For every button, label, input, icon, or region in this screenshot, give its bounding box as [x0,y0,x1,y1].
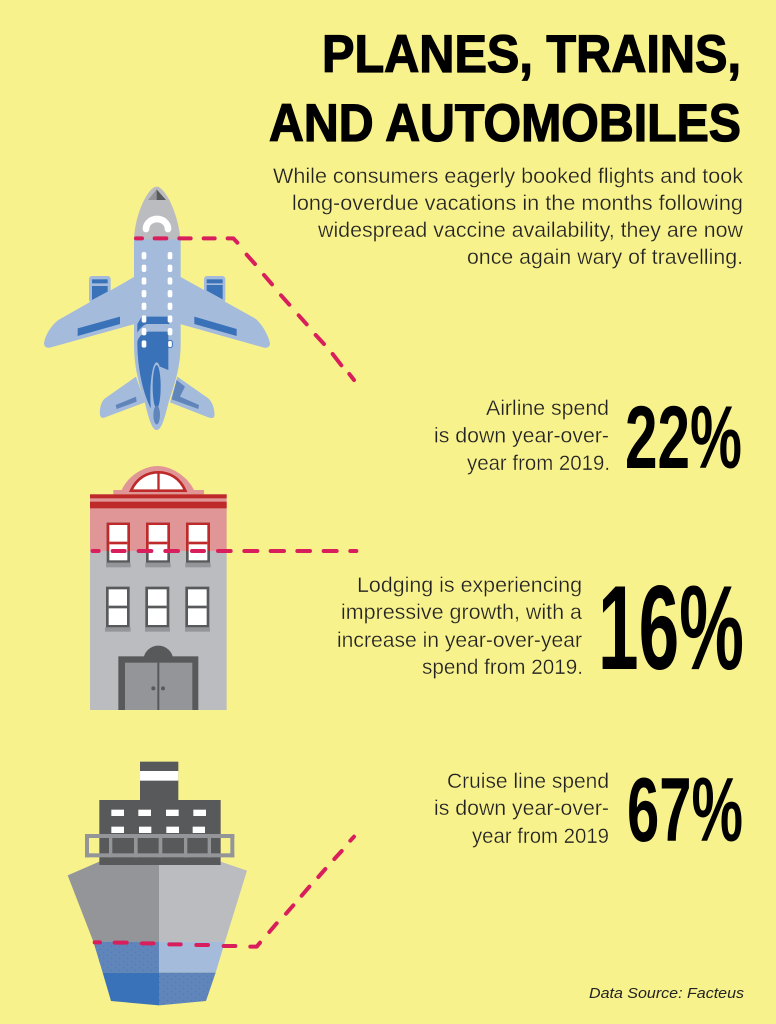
hotel upper windows [106,523,211,567]
hotel cornice [90,494,227,508]
ship hull upper [68,862,247,942]
cruise caption [434,769,609,848]
data source: Data Source: Facteus [589,985,745,1002]
hotel lower storey [90,551,227,710]
lodging caption: Lodging is experiencing [357,573,582,597]
airline caption: Airline spend [486,396,609,420]
lodging caption: increase in year-over-year [337,628,582,652]
stat: cruise line [434,760,743,861]
plane nose [134,187,180,239]
stat: airline [434,387,742,487]
ship superstructure [99,800,221,865]
hotel fanlight window [131,472,185,491]
title [269,25,741,153]
hotel lower windows [105,587,210,632]
title: PLANES, TRAINS, [322,25,741,84]
airline caption [434,396,610,475]
icon: cruise ship [68,762,354,1005]
plane tail flaps [116,380,199,409]
ship hull waterline [93,942,225,1005]
title: AND AUTOMOBILES [269,94,741,153]
ship funnel [140,762,178,800]
plane fuselage [134,238,181,430]
plane engines and flaps [78,279,237,336]
lodging caption: impressive growth, with a [341,600,582,624]
intro text: widespread vaccine availability, they are now [317,218,743,242]
cruise caption: Cruise line spend [447,769,609,793]
airline caption: is down year-over- [434,424,609,448]
dashed leader: airplane [136,238,354,380]
dashed leader: hotel [93,545,356,557]
ship railing [85,834,234,857]
cruise caption: year from 2019 [472,824,609,848]
plane wings [44,276,270,418]
lodging caption [337,573,583,679]
ship windows [111,810,206,833]
hotel dome [113,466,204,494]
intro text: once again wary of travelling. [467,245,743,269]
hotel entrance door [118,646,198,710]
icon: hotel building [90,466,356,710]
plane windows [142,252,172,348]
dashed leader: ship [95,837,354,947]
intro text [273,164,743,269]
plane rear body [137,317,169,428]
intro text: long-overdue vacations in the months following [292,191,743,215]
airline caption: year from 2019. [467,451,610,475]
stat: lodging [337,561,744,695]
lodging caption: spend from 2019. [422,655,583,679]
hotel upper storey [90,494,227,551]
icon: airplane [44,187,354,430]
intro text: While consumers eagerly booked flights and took [273,164,743,188]
cruise caption: is down year-over- [434,796,609,820]
plane cockpit [146,189,168,229]
